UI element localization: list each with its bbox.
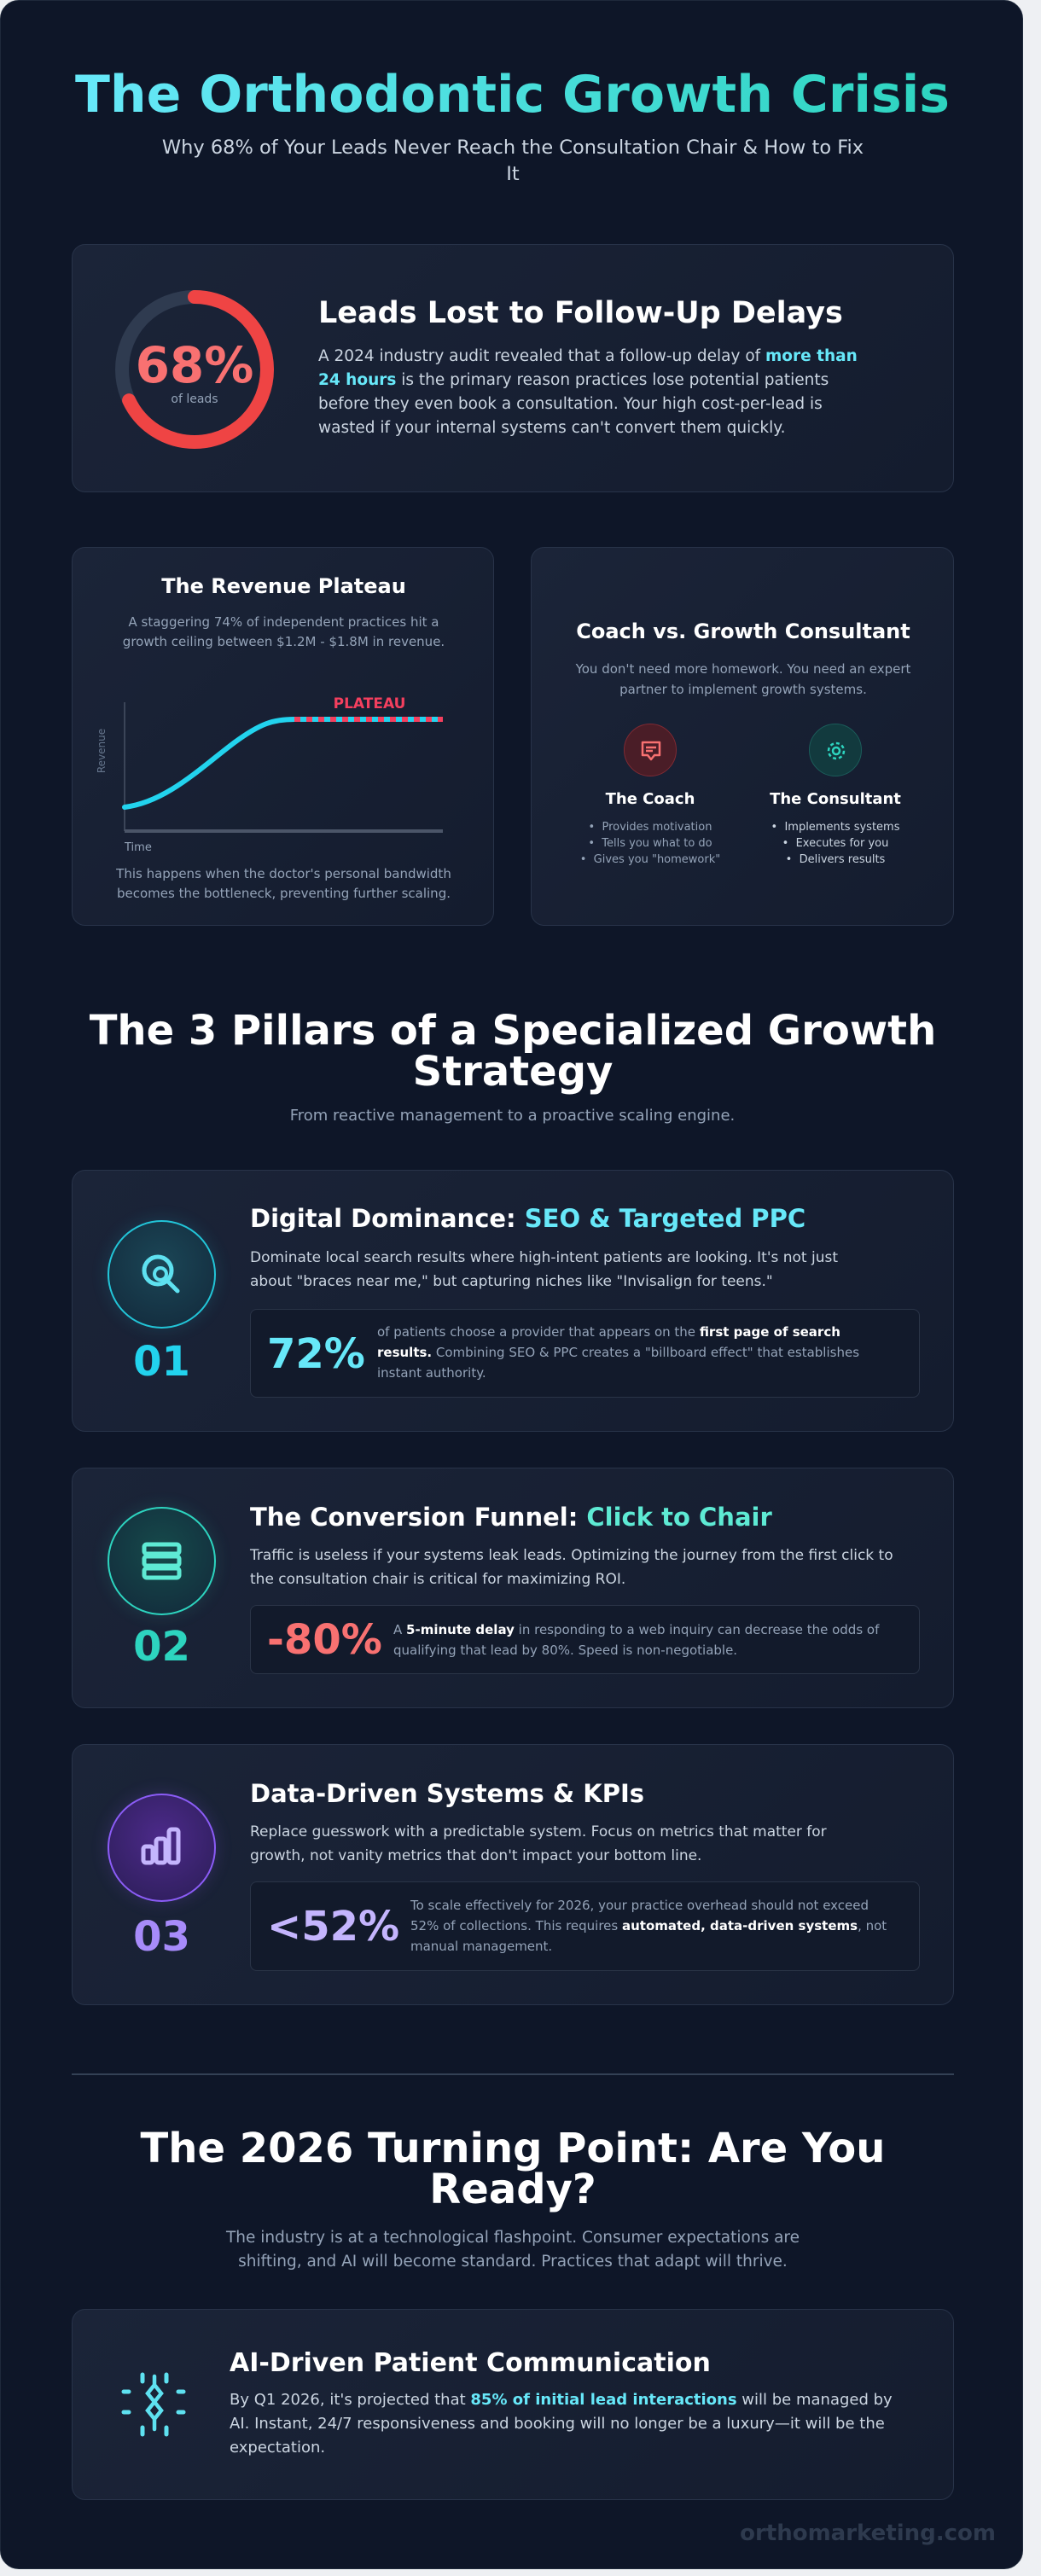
footer: brand: orthomarketing.com: [740, 2521, 996, 2546]
number: 01: [133, 1338, 190, 1386]
text: wasted if your internal systems can't convert them quickly.: [318, 419, 785, 437]
text: Dominate local search results where high-intent patients are looking. It's not just about "braces near me," but capturing niches like "Invisalign for teens.": [250, 1249, 838, 1290]
text: A staggering 74% of independent practices hit a growth ceiling between $1.2M - $1.8M in revenue.: [123, 614, 445, 649]
title: The Conversion Funnel: Click to Chair: [250, 1503, 772, 1532]
column: coach: • Provides motivation: [589, 821, 712, 834]
icon: bar chart: [108, 1794, 216, 1902]
text: A 2024 industry audit revealed that a follow-up delay of more than: [318, 347, 858, 365]
text: Traffic is useless if your systems leak leads. Optimizing the journey from the first click to the consultation chair is critical for maximizing ROI.: [250, 1547, 893, 1588]
icon: AI dna: [121, 2372, 186, 2437]
panel: pillar 03: [72, 1744, 954, 2005]
stat box: of patients choose a provider that appears on the first page of search results. Combining SEO & PPC creates a "billboard effect" that establishes instant authority.: [377, 1324, 859, 1381]
icon: magnifier: [108, 1220, 216, 1329]
number: 03: [133, 1913, 190, 1961]
heading: Coach vs. Growth Consultant: [576, 619, 910, 643]
column: consultant: • Implements systems: [771, 821, 899, 834]
column: coach: • Gives you "homework": [580, 853, 720, 866]
stat box: [250, 1309, 920, 1398]
title: AI-Driven Patient Communication: [230, 2348, 711, 2378]
stat box: [250, 1605, 920, 1674]
stat box: A 5-minute delay in responding to a web inquiry can decrease the odds of qualifying that lead by 80%. Speed is non-negotiable.: [393, 1622, 879, 1658]
text: before they even book a consultation. Your high cost-per-lead is: [318, 395, 823, 413]
section heading: pillars: The 3 Pillars of a Specialized Growth Strategy: [90, 1007, 936, 1096]
stat box: 72%: [267, 1330, 365, 1378]
line chart: PLATEAU: [334, 695, 405, 712]
section heading: 2026: The 2026 Turning Point: Are You Ready?: [141, 2125, 885, 2213]
column: consultant: • Executes for you: [782, 837, 888, 850]
title: Data-Driven Systems & KPIs: [250, 1779, 644, 1808]
panel: leads lost: [72, 244, 954, 492]
subtitle: [162, 137, 864, 185]
caption: This happens when the doctor's personal bandwidth becomes the bottleneck, preventing further scaling.: [116, 866, 451, 901]
line chart: [96, 695, 443, 854]
line chart: Time: [124, 841, 152, 854]
donut chart 68%: 68%: [136, 336, 253, 394]
panel: revenue plateau: [72, 547, 494, 926]
line chart: Revenue: [96, 729, 108, 773]
section text: The industry is at a technological flashpoint. Consumer expectations are shifting, and AI will become standard. Practices that adapt will thrive.: [226, 2229, 800, 2271]
donut chart 68%: [115, 290, 274, 449]
text: Replace guesswork with a predictable system. Focus on metrics that matter for growth, not vanity metrics that don't impact your bottom line.: [250, 1823, 827, 1864]
text: [318, 347, 858, 437]
column: coach: • Tells you what to do: [588, 837, 712, 850]
text: 24 hours is the primary reason practices lose potential patients: [318, 371, 829, 389]
icon: chat: [624, 724, 677, 776]
title: The Orthodontic Growth Crisis: [75, 65, 950, 125]
donut chart 68%: of leads: [171, 393, 218, 406]
panel: coach vs consultant: [531, 547, 954, 926]
title: Digital Dominance: SEO & Targeted PPC: [250, 1204, 805, 1233]
heading: The Revenue Plateau: [161, 574, 406, 598]
stat box: To scale effectively for 2026, your practice overhead should not exceed 52% of collections. This requires automated, data-driven systems, not manual management.: [410, 1898, 887, 1954]
column: coach: [580, 724, 720, 866]
stat box: -80%: [267, 1616, 382, 1664]
panel: AI communication: [72, 2309, 954, 2500]
panel: pillar 02: [72, 1468, 954, 1708]
text: You don't need more homework. You need an expert partner to implement growth systems.: [576, 661, 910, 697]
icon: gear: [809, 724, 862, 776]
number: 02: [133, 1623, 190, 1671]
column: coach: The Coach: [606, 790, 695, 808]
column: consultant: • Delivers results: [786, 853, 885, 866]
column: consultant: The Consultant: [770, 790, 901, 808]
panel: pillar 01: [72, 1170, 954, 1432]
subtitle: It: [506, 163, 520, 185]
icon: server stack: [108, 1507, 216, 1615]
section subtitle: From reactive management to a proactive scaling engine.: [290, 1107, 735, 1125]
stat box: <52%: [267, 1903, 399, 1951]
heading: Leads Lost to Follow-Up Delays: [318, 296, 843, 330]
column: consultant: [770, 724, 901, 866]
text: By Q1 2026, it's projected that 85% of initial lead interactions will be managed by AI. Instant, 24/7 responsiveness and booking will no longer be a luxury—it will be the expectation.: [230, 2391, 893, 2457]
subtitle: Why 68% of Your Leads Never Reach the Consultation Chair & How to Fix: [162, 137, 864, 159]
stat box: [250, 1881, 920, 1971]
